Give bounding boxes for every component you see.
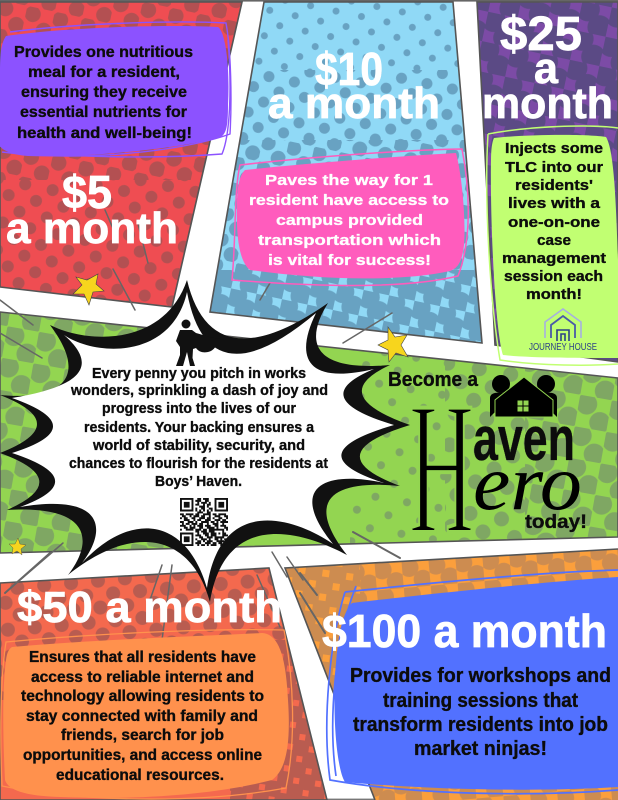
card: $25 description: month! [526, 287, 582, 303]
card: $100 description [322, 570, 618, 794]
card: $50 description: technology allowing residents to [21, 688, 264, 705]
card: $10 description: is vital for success! [268, 252, 431, 269]
panel: green centre background [0, 310, 618, 555]
panel: purple $25 background [470, 0, 618, 365]
card: $50 description: access to reliable internet and [31, 669, 254, 686]
card: $25 description: case [537, 233, 571, 249]
card: $10 description: resident have access to [249, 192, 449, 209]
heading: $25 a month: month [482, 79, 613, 128]
card: $25 description: management [502, 251, 606, 267]
headline: Become a Haven Hero today: H [409, 364, 474, 574]
card: $5 description: health and well-being! [17, 125, 192, 142]
heading: $25 a month: a [534, 44, 559, 93]
heading: $5 a month [6, 166, 178, 253]
heading: $25 a month: $25 [500, 8, 582, 61]
heading: $10 a month: a month [268, 79, 440, 128]
logo: Journey House: JOURNEY HOUSE [529, 342, 597, 353]
heading: $5 a month: a month [6, 204, 178, 253]
card: $25 description: one-on-one [508, 215, 600, 231]
star burst with message [0, 280, 410, 602]
card: $50 description: friends, search for job [61, 727, 224, 744]
star: top left [73, 274, 104, 305]
headline: Become a Haven Hero today: Become a [388, 369, 479, 391]
heading: $25 a month [482, 8, 613, 128]
card: $10 description: campus provided [276, 212, 423, 229]
star burst with message: Boys’ Haven. [155, 474, 242, 490]
panel: orange $100 background [280, 545, 618, 800]
card: $5 description: essential nutrients for [20, 104, 187, 121]
card: $10 description: Paves the way for 1 [265, 172, 433, 189]
card: $100 description: $100 a month [322, 605, 607, 657]
star burst with message: progress into the lives of our [102, 401, 296, 417]
card: $5 description: meal for a resident, [28, 64, 180, 81]
heading: $10 a month: $10 [315, 43, 383, 95]
card: $25 description: TLC into our [505, 160, 603, 176]
star burst with message: wonders, sprinkling a dash of joy and [70, 383, 328, 399]
card: $10 description [232, 149, 468, 286]
star burst with message: Every penny you pitch in works [92, 366, 306, 382]
card: $50 description [1, 630, 293, 799]
star burst with message: residents. Your backing ensures a [84, 420, 315, 436]
icon: caped superhero [176, 320, 220, 366]
star burst with message: world of stability, security, and [92, 438, 305, 454]
card: $25 description [487, 126, 618, 365]
logo: Journey House [529, 309, 597, 353]
card: $25 description: Injects some [505, 141, 603, 157]
card: $5 description: Provides one nutritious [14, 44, 193, 61]
QR code [180, 499, 228, 545]
card: $100 description: training sessions that [383, 690, 578, 712]
panel: red-orange $50 background [0, 560, 330, 800]
heading: $10 a month [268, 43, 440, 128]
star burst with message: chances to flourish for the residents at [69, 456, 328, 472]
icon: people and house [490, 375, 557, 417]
headline: Become a Haven Hero today [388, 364, 587, 574]
card: $25 description: lives with a [508, 196, 601, 212]
card: $100 description: transform residents into job [353, 714, 608, 736]
heading: $5 a month: $5 [62, 166, 112, 218]
card: $50 description: opportunities, and access online [23, 747, 262, 764]
star: lower left [9, 538, 26, 555]
heading: $50 a month: $50 a month [17, 583, 282, 632]
headline: Become a Haven Hero today: ero [473, 439, 582, 526]
card: $50 description: stay connected with family and [26, 708, 258, 725]
headline: Become a Haven Hero today: today! [525, 512, 587, 533]
card: $25 description: residents' [515, 178, 593, 194]
card: $100 description: Provides for workshops and [350, 665, 611, 687]
card: $10 description: transportation which [258, 232, 441, 249]
card: $100 description: market ninjas! [414, 738, 547, 760]
card: $50 description: Ensures that all residents have [29, 649, 256, 666]
card: $5 description [0, 22, 231, 157]
star: right [378, 327, 408, 362]
card: $5 description: ensuring they receive [21, 84, 187, 101]
panel: red $5 background [0, 0, 250, 310]
headline: Become a Haven Hero today: aven [473, 405, 575, 474]
card: $50 description: educational resources. [56, 767, 224, 784]
panel: blue $10 background [205, 0, 490, 350]
card: $25 description: session each [504, 269, 603, 285]
